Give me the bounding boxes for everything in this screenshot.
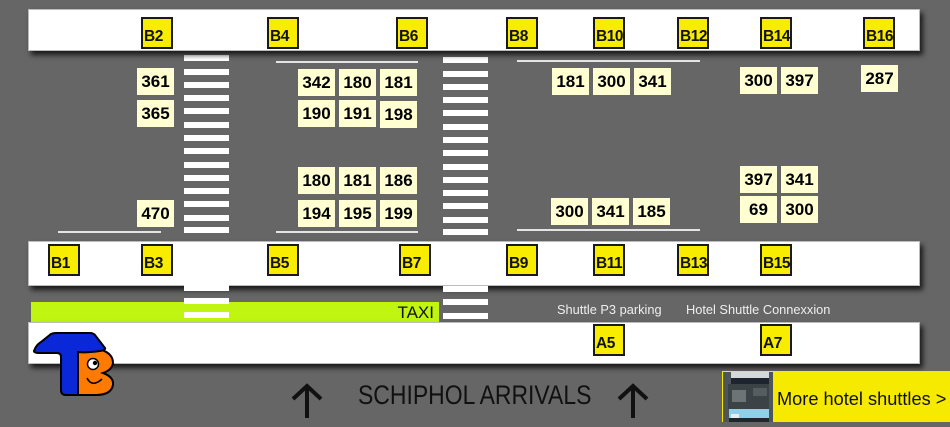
divider B9-B13 (517, 229, 700, 231)
bay B13: B13 (680, 255, 707, 272)
route 190: 190 (302, 104, 331, 123)
route 300 B10 (593, 68, 630, 95)
route 300 B11 (551, 198, 588, 225)
route 191 (339, 100, 376, 127)
route 185 (633, 198, 670, 225)
route 181 B10 (552, 68, 589, 95)
logo: TB (33, 332, 114, 396)
bay B1 (48, 244, 80, 276)
route 180 lower: 180 (302, 171, 331, 190)
top platform (28, 9, 920, 51)
route 185: 185 (637, 202, 666, 221)
crosswalk right lower (443, 286, 488, 319)
bay B6: B6 (399, 28, 418, 45)
route 69 (740, 196, 777, 223)
bay B1: B1 (51, 255, 70, 272)
bay A7 (760, 324, 792, 356)
route 397 B15 (740, 166, 777, 193)
crosswalk left lower (184, 285, 229, 318)
bay B15 (760, 244, 792, 276)
bay B10 (593, 17, 625, 49)
divider B8-B12 top (517, 60, 700, 62)
bay B3: B3 (144, 255, 163, 272)
bay B8: B8 (509, 28, 528, 45)
bay B16: B16 (866, 28, 893, 45)
route 361: 361 (141, 72, 170, 91)
route 181 B10: 181 (556, 72, 585, 91)
bay B11 (593, 244, 625, 276)
route 180 lower (298, 167, 335, 194)
route 341 B11 (592, 198, 629, 225)
taxi lane (31, 302, 439, 322)
route 341 B15 (781, 166, 818, 193)
button: more hotel shuttles: More hotel shuttles > (777, 389, 946, 409)
bay B14 (760, 17, 792, 49)
bay B7 (399, 244, 431, 276)
route 186: 186 (384, 171, 413, 190)
route 180: 180 (343, 73, 372, 92)
route 181 lower (339, 167, 376, 194)
route 194: 194 (302, 204, 331, 223)
bay B12 (677, 17, 709, 49)
bay B5 (267, 244, 299, 276)
bottom platform (28, 322, 920, 364)
route 365: 365 (141, 104, 170, 123)
route 361 (137, 68, 174, 95)
crosswalk right upper (443, 57, 488, 235)
taxi lane: TAXI (397, 303, 434, 322)
title: Schiphol arrivals: SCHIPHOL ARRIVALS (358, 380, 591, 410)
route 470: 470 (141, 204, 170, 223)
bay A7: A7 (763, 335, 782, 352)
bay B9 (506, 244, 538, 276)
route 341 B10: 341 (638, 72, 667, 91)
divider B1-B3 (58, 231, 161, 233)
bay B6 (396, 17, 428, 49)
route 341 B15: 341 (785, 170, 814, 189)
bay B4: B4 (270, 28, 289, 45)
route 199: 199 (384, 204, 413, 223)
bay B8 (506, 17, 538, 49)
label: hotel shuttle: Hotel Shuttle Connexxion (686, 302, 830, 317)
arrow right (618, 383, 648, 418)
route 181: 181 (384, 73, 413, 92)
label: shuttle P3 parking: Shuttle P3 parking (557, 302, 662, 317)
bay B9: B9 (509, 255, 528, 272)
bay B4 (267, 17, 299, 49)
route 397 B14: 397 (785, 71, 814, 90)
route 300 B11: 300 (555, 202, 584, 221)
route 191: 191 (343, 104, 372, 123)
route 287 (861, 65, 898, 92)
route 287: 287 (865, 69, 894, 88)
icon: bus photo (723, 372, 773, 422)
route 194 (298, 200, 335, 227)
route 198 (380, 101, 417, 128)
middle platform (28, 241, 920, 286)
bay A5: A5 (596, 335, 615, 352)
bay B11: B11 (596, 255, 622, 272)
button: more hotel shuttles (722, 371, 950, 422)
bay B7: B7 (402, 255, 421, 272)
route 470 (137, 200, 174, 227)
route 300 B15: 300 (785, 200, 814, 219)
bay B3 (141, 244, 173, 276)
bay B2: B2 (144, 28, 163, 45)
bay B2 (141, 17, 173, 49)
divider B5-B7 (276, 231, 418, 233)
bay B5: B5 (270, 255, 289, 272)
divider B4-B6 top (276, 61, 418, 63)
route 199 (380, 200, 417, 227)
route 190 (298, 100, 335, 127)
route 300 B10: 300 (597, 72, 626, 91)
route 341 B11: 341 (596, 202, 625, 221)
route 342 (298, 69, 335, 96)
route 69: 69 (749, 200, 768, 219)
route 195: 195 (343, 204, 372, 223)
bay B10: B10 (596, 28, 623, 45)
route 342: 342 (302, 73, 331, 92)
route 300 B14: 300 (744, 71, 773, 90)
bay B12: B12 (680, 28, 707, 45)
route 181 (380, 69, 417, 96)
route 397 B15: 397 (744, 170, 773, 189)
crosswalk left upper (184, 55, 229, 233)
bay A5 (593, 324, 625, 356)
bay B13 (677, 244, 709, 276)
bay B16 (863, 17, 895, 49)
bay B14: B14 (763, 28, 790, 45)
route 341 B10 (634, 68, 671, 95)
route 181 lower: 181 (343, 171, 372, 190)
bay B15: B15 (763, 255, 790, 272)
route 300 B15 (781, 196, 818, 223)
route 198: 198 (384, 105, 413, 124)
route 195 (339, 200, 376, 227)
route 180 (339, 69, 376, 96)
route 397 B14 (781, 67, 818, 94)
route 300 B14 (740, 67, 777, 94)
route 186 (380, 167, 417, 194)
route 365 (137, 100, 174, 127)
arrow left (292, 383, 322, 418)
